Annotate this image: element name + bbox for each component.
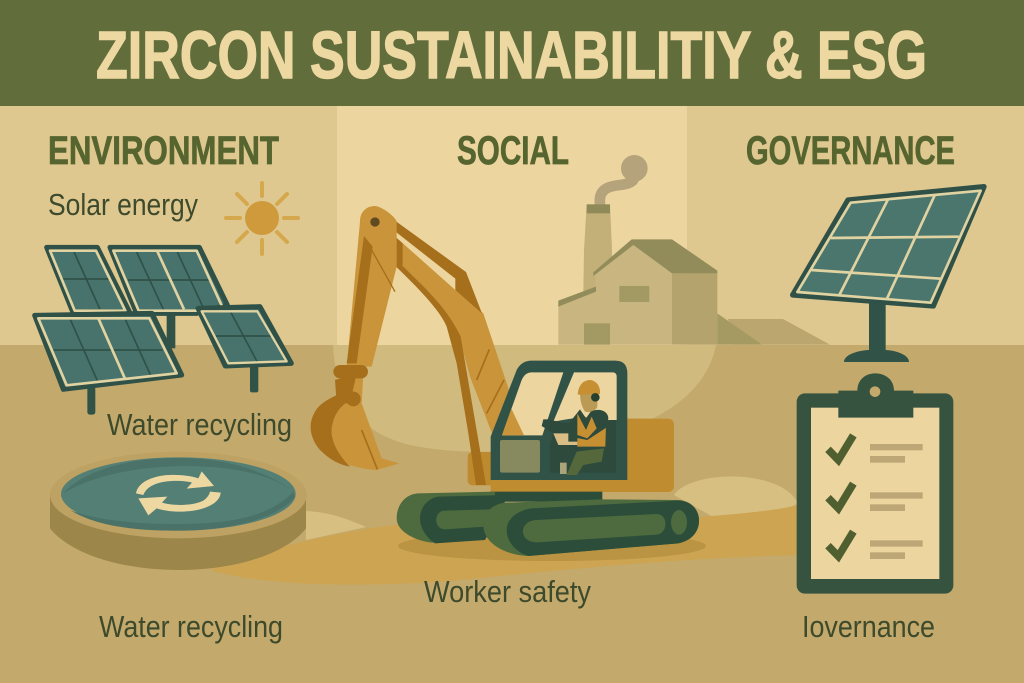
factory [558,162,830,345]
chimney [583,205,612,293]
tracks [397,492,699,556]
solar panel: governance [793,187,984,362]
right column icons [793,187,984,594]
heading: environment: ENVIRONMENT [48,129,279,173]
cab [491,361,627,480]
label: solar energy: Solar energy [48,187,198,222]
rear body [468,452,500,485]
label: water recycling upper: Water recycling [107,407,292,442]
solar panel: right [198,307,291,392]
operator [542,380,608,475]
excavator [310,206,674,492]
icon: recycle arrows [136,471,221,515]
label: water recycling lower: Water recycling [99,609,283,644]
heading: social: SOCIAL [457,129,569,173]
label: worker safety: Worker safety [424,574,591,609]
smoke [600,162,641,203]
checklist row 1 [828,435,923,463]
solar pole [167,312,175,348]
icon: sun [226,183,298,254]
checklist row 2 [828,484,923,511]
bucket [310,373,399,470]
icon: water tank [50,452,307,570]
solar panel: top left [47,247,129,312]
boom [398,239,524,435]
solar panel: top middle [110,247,227,313]
stick [347,206,397,367]
icon: clipboard [797,373,953,594]
title banner [0,0,1024,106]
solar panel group: environment [35,247,291,415]
label: governance: Iovernance [802,609,935,644]
factory building [558,245,672,345]
checklist row 3 [828,532,923,559]
solar panel: front left [35,313,182,415]
hill [728,319,830,345]
